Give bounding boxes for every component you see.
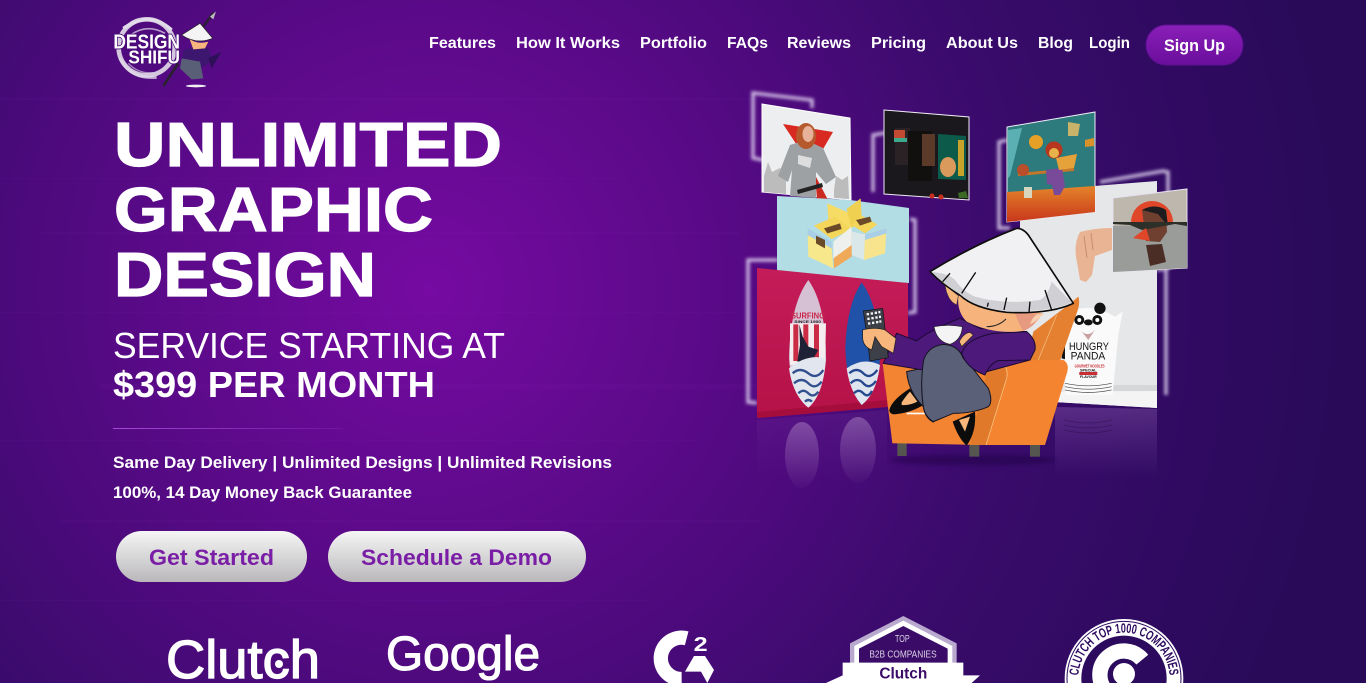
right sleeve: [962, 332, 1035, 375]
logo ninja mascot: [163, 11, 222, 87]
panda snack bag: SPECIAL: [1080, 369, 1097, 373]
robe and arm: [883, 318, 1030, 372]
navigation: FAQs: [727, 35, 768, 52]
top b2b companies badge: B2B COMPANIES: [869, 650, 937, 661]
panda snack bag: [1062, 303, 1123, 395]
card: packaged goods poster: [1020, 181, 1157, 408]
headline: [114, 111, 502, 310]
navigation: Features: [429, 35, 496, 52]
price subheading: $399 PER MONTH: [113, 364, 435, 405]
floor reflections: [757, 407, 1157, 488]
logo wordmark: SHIFU: [128, 46, 180, 67]
card: hero poster: [762, 104, 851, 200]
sign up button: [1146, 25, 1243, 65]
main leg: [922, 344, 991, 422]
navigation: Pricing: [871, 35, 926, 52]
schedule a demo button: Schedule a Demo: [361, 545, 552, 570]
panda snack bag: FLAVOUR: [1080, 375, 1097, 379]
card: surfboards on red wall: [757, 268, 908, 418]
card: packaging box: [777, 196, 909, 283]
top b2b companies badge: TOP: [895, 634, 910, 645]
headline: DESIGN: [114, 241, 376, 310]
product cubes: [808, 198, 887, 268]
navigation: About Us: [946, 35, 1018, 52]
headline: UNLIMITED: [114, 111, 502, 180]
card: menu mockup: [884, 110, 969, 200]
cup hand: [959, 332, 973, 347]
benefits text: [113, 454, 612, 502]
face: [945, 285, 1044, 332]
get started button: Get Started: [149, 545, 274, 570]
benefits text: 100%, 14 Day Money Back Guarantee: [113, 484, 412, 502]
mascot relaxing in armchair: [863, 228, 1079, 465]
navigation: Login: [1089, 35, 1130, 52]
surfboard: statue: [789, 280, 826, 408]
top b2b companies badge: [826, 616, 980, 683]
card: illustration of woman at desk: [1007, 112, 1095, 222]
back leg: [907, 368, 933, 422]
panda snack bag: PANDA: [1071, 350, 1106, 362]
card: portrait art: [1113, 189, 1187, 272]
armchair: [883, 297, 1079, 457]
logo: [113, 11, 222, 87]
navigation: Blog: [1038, 35, 1073, 52]
navigation: Reviews: [787, 35, 851, 52]
hand and remote control: [863, 308, 896, 361]
divider: [113, 428, 343, 429]
shoes: [889, 388, 975, 446]
navigation: How It Works: [516, 35, 620, 52]
clutch top 1000 companies seal: CLUTCH TOP 1000 COMPANIES: [1070, 623, 1178, 675]
top b2b companies badge: Clutch: [879, 666, 927, 683]
logo brush ring: [119, 19, 175, 77]
glow frames: [748, 93, 1168, 403]
navigation: [429, 35, 1130, 52]
benefits text: Same Day Delivery | Unlimited Designs | Unlimited Revisions: [113, 454, 612, 472]
hand with spice: [1076, 228, 1112, 282]
price subheading: [113, 325, 505, 405]
sign up button: Sign Up: [1164, 37, 1225, 55]
schedule a demo button: [328, 531, 586, 582]
price subheading: SERVICE STARTING AT: [113, 325, 505, 366]
surfboard: statue: SINCE 1900: [794, 320, 821, 324]
g2 logo: [661, 634, 714, 683]
g2 logo: 2: [694, 634, 708, 656]
surfboard: wave: [845, 282, 881, 405]
navigation: Portfolio: [640, 35, 707, 52]
portfolio collage: [748, 93, 1187, 488]
google logo: Google: [386, 628, 540, 681]
get started button: [116, 531, 307, 582]
logo wordmark: DESIGN: [113, 32, 180, 54]
headline: GRAPHIC: [114, 176, 433, 245]
surfboard: statue: SURFING: [791, 311, 825, 321]
chair shadow: [890, 455, 1057, 465]
panda snack bag: GOURMET NOODLES: [1075, 364, 1105, 369]
panda snack bag: HUNGRY: [1069, 341, 1109, 353]
teacup: [934, 325, 962, 344]
logo wordmark: [113, 32, 180, 67]
conical hat: [930, 228, 1073, 313]
